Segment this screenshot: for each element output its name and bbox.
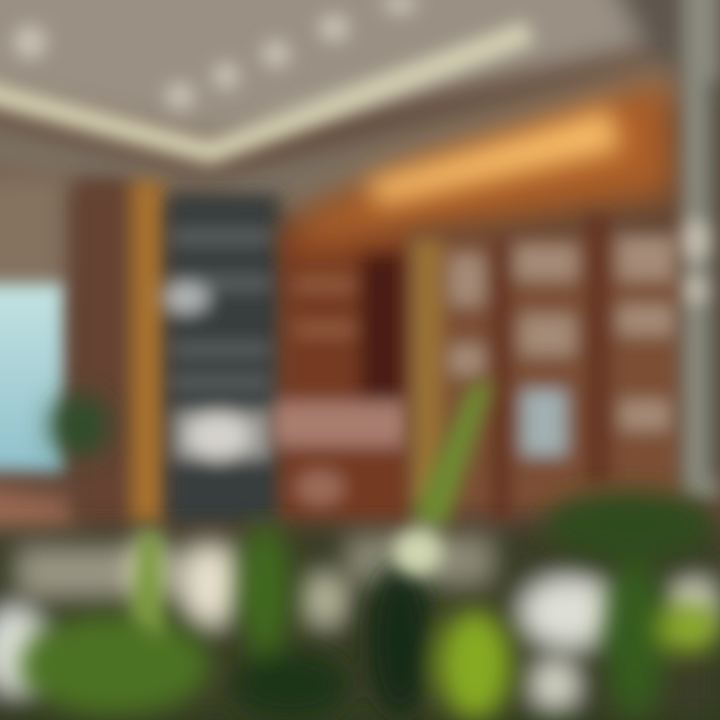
ceiling light dots [13,0,418,110]
right shelving [410,215,680,520]
ceiling [0,0,720,215]
left table [0,482,85,580]
wood cabinet [272,230,410,520]
window [0,282,65,472]
left wall [0,170,70,285]
floor and pale highlights [0,530,720,720]
plant leaf blades [130,380,495,640]
plant foliage [20,393,720,720]
right column [680,0,720,500]
orange cove [290,75,675,250]
cove light band [0,32,530,152]
wood column [75,180,164,525]
glowing cove light [365,108,622,205]
dark shelving [161,195,280,525]
